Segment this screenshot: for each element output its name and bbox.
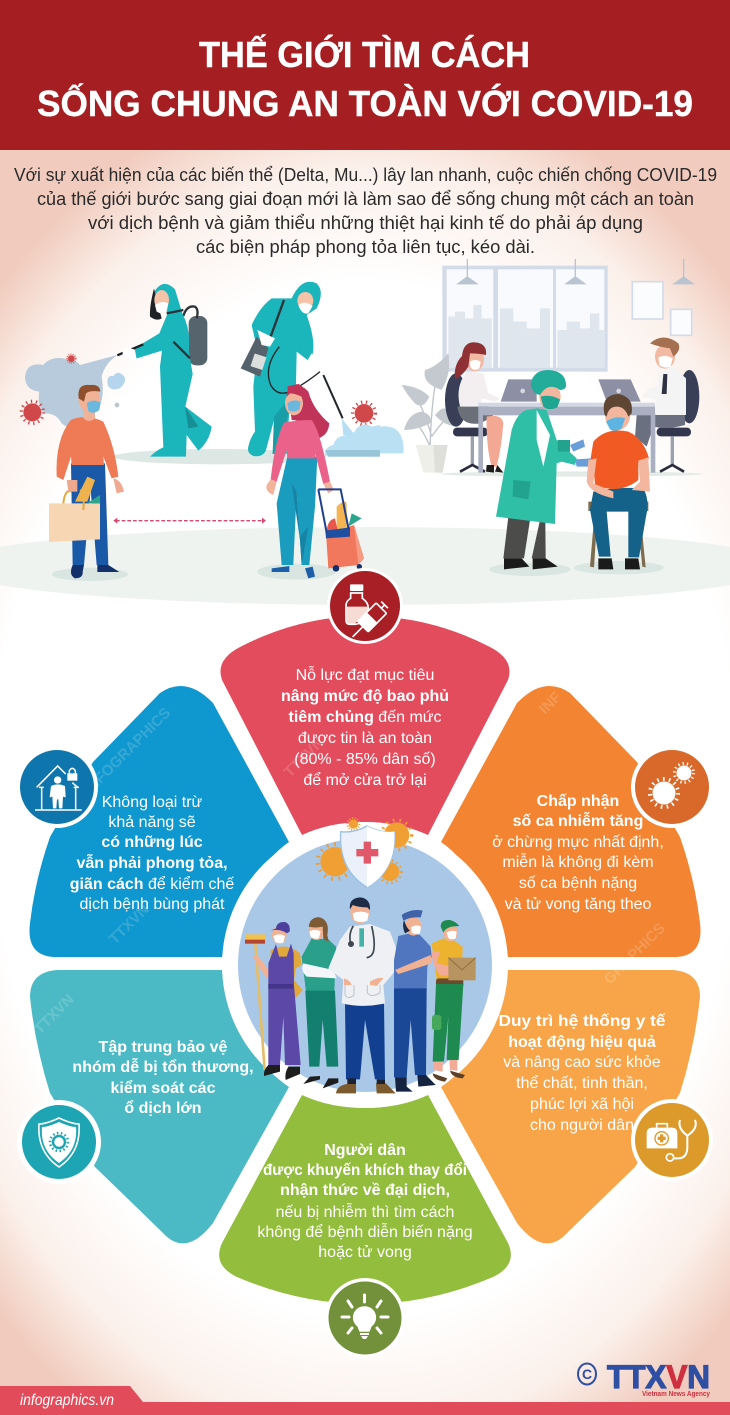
text: teal petal: kiểm soát các: [111, 1079, 216, 1097]
header band: [0, 0, 730, 150]
text: teal petal: ổ dịch lớn: [124, 1099, 202, 1117]
seated woman: [445, 342, 503, 473]
logo: TTXVN: C: [582, 1366, 592, 1382]
text: light orange petal: [498, 1013, 666, 1134]
panel: teal petal: [30, 970, 289, 1243]
text: light orange petal: hoạt động hiệu quả: [508, 1034, 656, 1051]
text: blue petal: Không loại trừ: [102, 794, 203, 811]
police officer: [394, 910, 436, 1092]
text: orange petal: ở chừng mực nhất định,: [492, 834, 664, 851]
text: red petal: [281, 665, 449, 789]
panel: blue petal: TTXVN: [106, 901, 153, 948]
text: red petal: để mở cửa trở lại: [303, 771, 427, 789]
illustration: office and vaccination: [380, 259, 703, 576]
icon: shield with virus: [17, 1100, 101, 1184]
intro paragraph: [14, 165, 717, 257]
text: blue petal: [70, 794, 234, 913]
text: red petal: được tin là an toàn: [298, 730, 432, 747]
panel: light orange petal: [441, 920, 700, 1243]
ground: [0, 527, 730, 605]
distance arrow: [113, 518, 266, 524]
logo: TTXVN: TTXVN: [607, 1359, 710, 1395]
panel: blue petal: INFOGRAPHICS: [81, 704, 174, 798]
shield with cross: [340, 826, 395, 887]
text: orange petal: và tử vong tăng theo: [505, 896, 652, 913]
suitcase: [326, 525, 364, 568]
text: teal petal: [72, 1039, 254, 1117]
text: orange petal: Chấp nhận: [537, 793, 619, 810]
worker with shoulder sprayer: [241, 282, 380, 457]
text: green petal: nếu bị nhiễm thì tìm cách: [276, 1202, 454, 1221]
text: light orange petal: phúc lợi xã hội: [530, 1096, 634, 1113]
panel: light orange petal: GRAPHICS: [601, 920, 669, 988]
delivery worker with box: [432, 920, 476, 1082]
intro paragraph: của thế giới bước sang giai đoạn mới là làm sao để sống chung một cách an toàn: [37, 189, 694, 209]
laptops: [501, 379, 641, 402]
text: red petal: (80% - 85% dân số): [294, 751, 436, 768]
panel: blue petal: [29, 686, 289, 957]
ground shadow under disinfection workers: [113, 449, 327, 464]
text: red petal: nâng mức độ bao phủ: [281, 688, 449, 705]
panel: orange petal: [441, 686, 701, 957]
panel: red petal: TTXVN: [281, 734, 328, 781]
text: light orange petal: thể chất, tinh thần,: [516, 1074, 648, 1092]
potted plant: [402, 353, 456, 473]
doctor vaccinating: [489, 370, 593, 576]
intro paragraph: Với sự xuất hiện của các biến thể (Delta, Mu...) lây lan nhanh, cuộc chiến chống COVID-19: [14, 165, 717, 185]
title: THẾ GIỚI TÌM CÁCH: [199, 33, 530, 75]
wall frames: [632, 282, 692, 335]
footer site name: infographics.vn: [20, 1392, 114, 1409]
panel: orange petal: INF: [536, 689, 565, 718]
text: green petal: Người dân: [324, 1142, 406, 1159]
text: green petal: [257, 1142, 473, 1261]
text: light orange petal: Duy trì hệ thống y tế: [498, 1013, 666, 1030]
text: orange petal: số ca nhiễm tăng: [513, 811, 643, 830]
text: blue petal: dịch bệnh bùng phát: [79, 896, 225, 913]
man with shopping bag: [49, 385, 128, 581]
text: teal petal: nhóm dễ bị tổn thương,: [72, 1057, 254, 1076]
icon: medical bag and stethoscope: [631, 1099, 713, 1181]
text: orange petal: số ca bệnh nặng: [519, 875, 637, 892]
panel: teal petal: TTXVN: [31, 991, 78, 1038]
icon: vaccine bottle and syringe: [327, 568, 403, 644]
text: orange petal: miễn là không đi kèm: [502, 852, 654, 871]
text: light orange petal: và nâng cao sức khỏe: [503, 1054, 661, 1071]
center circle with frontline workers: [222, 818, 508, 1108]
nurse: [302, 917, 338, 1088]
text: green petal: hoặc tử vong: [318, 1244, 412, 1261]
title: [37, 33, 693, 124]
text: light orange petal: cho người dân: [530, 1117, 634, 1134]
footer band: [0, 1386, 730, 1415]
text: blue petal: giãn cách để kiểm chế: [70, 875, 234, 893]
text: blue petal: khả năng sẽ: [108, 814, 196, 831]
intro paragraph: các biện pháp phong tỏa liên tục, kéo dài.: [196, 237, 535, 257]
disinfectant cloud left: [25, 355, 117, 427]
icon: light bulb: [325, 1278, 405, 1358]
text: green petal: được khuyến khích thay đổi: [263, 1161, 467, 1179]
ceiling lamps: [456, 259, 695, 284]
office window: [442, 266, 608, 372]
spray cloud edge: [380, 426, 404, 453]
illustration: disinfection and distancing: [21, 282, 380, 581]
vaccinated patient: [574, 394, 664, 574]
text: green petal: nhận thức về đại dịch,: [280, 1182, 450, 1199]
text: blue petal: vẫn phải phong tỏa,: [76, 853, 228, 872]
doctor with stethoscope: [328, 897, 402, 1093]
text: red petal: Nỗ lực đạt mục tiêu: [296, 665, 434, 684]
shopping bag: [49, 503, 100, 542]
logo: TTXVN: Vietnam News Agency: [642, 1391, 710, 1398]
text: orange petal: [492, 793, 664, 913]
office desk: [478, 403, 655, 473]
intro paragraph: với dịch bệnh và giảm thiểu những thiệt hại kinh tế do phải áp dụng: [88, 213, 643, 233]
title: SỐNG CHUNG AN TOÀN VỚI COVID-19: [37, 82, 693, 124]
virus particles: [21, 354, 375, 425]
icon: virus: [631, 746, 713, 828]
icon: lockdown house: [16, 746, 98, 828]
floor shadow: [440, 471, 703, 477]
text: blue petal: có những lúc: [101, 834, 203, 851]
woman with suitcase: [257, 384, 364, 580]
text: red petal: tiêm chủng đến mức: [289, 709, 441, 726]
panel: green petal: [219, 1095, 511, 1304]
worker with backpack sprayer: [117, 284, 212, 457]
panel: red petal: [220, 616, 510, 835]
viruses behind shield: [318, 818, 412, 883]
text: teal petal: Tập trung bảo vệ: [99, 1039, 228, 1056]
seated man: [635, 337, 699, 472]
worker with broom: [245, 922, 303, 1080]
text: green petal: không để bệnh diễn biến nặng: [257, 1222, 473, 1241]
